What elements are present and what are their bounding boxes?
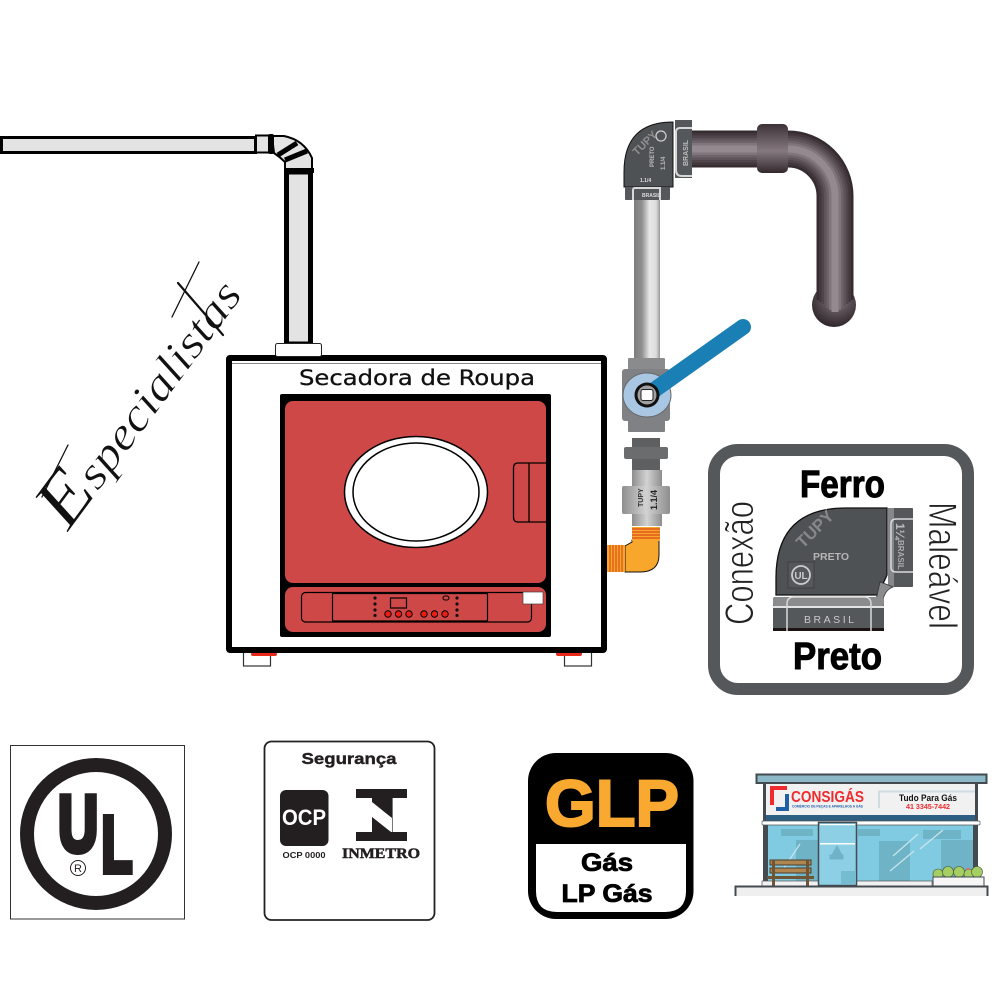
badge: UL: [10, 746, 184, 919]
panel: iron fitting: [714, 450, 968, 689]
ball valve: [622, 327, 743, 432]
orange elbow connector: [607, 527, 660, 572]
dryer front: [280, 394, 551, 637]
side label: Conexão: Conexão: [718, 501, 762, 625]
dryer cabinet: [229, 358, 604, 650]
sidewalk: [735, 886, 988, 896]
badge: GLP: [528, 753, 694, 919]
valve handle: [650, 327, 743, 393]
heading: Segurança: Segurança: [302, 751, 397, 768]
iron elbow fitting: [624, 120, 692, 200]
icon: OCP: OCP 0000: [282, 851, 326, 860]
badge: UL: L: [101, 800, 132, 889]
icon: OCP: [280, 790, 328, 860]
silver vertical pipe: [634, 200, 660, 360]
slogan: Tudo Para Gás: [899, 793, 957, 803]
vent base plate: [276, 344, 322, 356]
badge: GLP: LP Gás: [562, 880, 652, 908]
threaded coupling: [622, 470, 670, 526]
control panel: [285, 587, 546, 632]
door window: [344, 436, 488, 548]
planter: [933, 866, 984, 886]
badge: safety certification: [264, 742, 434, 920]
icon: elbow fitting: TUPY: [792, 506, 838, 552]
icon: elbow fitting: [773, 506, 913, 631]
heading: Preto: Preto: [793, 636, 882, 678]
bench: [767, 860, 814, 886]
badge: GLP: GLP: [545, 766, 679, 840]
icon: elbow fitting: UL: [794, 571, 808, 582]
door handle: [514, 463, 546, 522]
phone number: 41 3345-7442: [906, 802, 950, 811]
threaded coupling: TUPY: [638, 488, 645, 507]
door panel: [285, 401, 546, 583]
iron elbow fitting: PRETO: [650, 146, 656, 167]
script label: Especialistas: Especialistas: [16, 257, 256, 542]
heading: Ferro: Ferro: [800, 464, 885, 506]
iron elbow fitting: BRASIL: [642, 193, 661, 199]
brand name: CONSIGÁS: [791, 789, 864, 806]
badge: GLP: Gás: [581, 849, 633, 877]
icon: elbow fitting: BRASIL: [804, 614, 854, 626]
icon: elbow fitting: PRETO: [813, 551, 849, 563]
storefront illustration: COMÉRCIO DE PEÇAS E APARELHOS A GÁS: [792, 804, 864, 808]
icon: OCP: OCP: [282, 805, 326, 830]
side label: Maleável: Maleável: [920, 502, 964, 629]
threaded coupling: 1.1/4: [649, 490, 659, 510]
badge: UL: R: [74, 863, 82, 875]
shop window: [765, 824, 976, 882]
exhaust vent pipe: [2, 134, 314, 344]
storefront illustration: [735, 774, 988, 896]
badge: UL: U: [58, 779, 98, 868]
roof: [756, 774, 986, 783]
icon: elbow fitting: 1¼: [893, 523, 907, 541]
dryer feet: [244, 651, 592, 666]
iron elbow fitting: BRASIL: [683, 139, 690, 166]
dryer title: Secadora de Roupa: [299, 366, 535, 390]
dark gas pipe: [692, 124, 856, 327]
iron elbow fitting: 1.1/4: [661, 156, 667, 170]
logo mark: [772, 788, 787, 805]
icon: elbow fitting: BRASIL: [896, 540, 905, 570]
door: [818, 822, 856, 886]
iron elbow fitting: 1.1/4: [640, 178, 651, 184]
pipe union: [624, 438, 668, 470]
icon: INMETRO: INMETRO: [342, 846, 420, 862]
awning rail: [762, 821, 980, 825]
iron elbow fitting: TUPY: [631, 128, 660, 158]
sign board: [765, 783, 977, 815]
icon: INMETRO: [342, 789, 420, 862]
